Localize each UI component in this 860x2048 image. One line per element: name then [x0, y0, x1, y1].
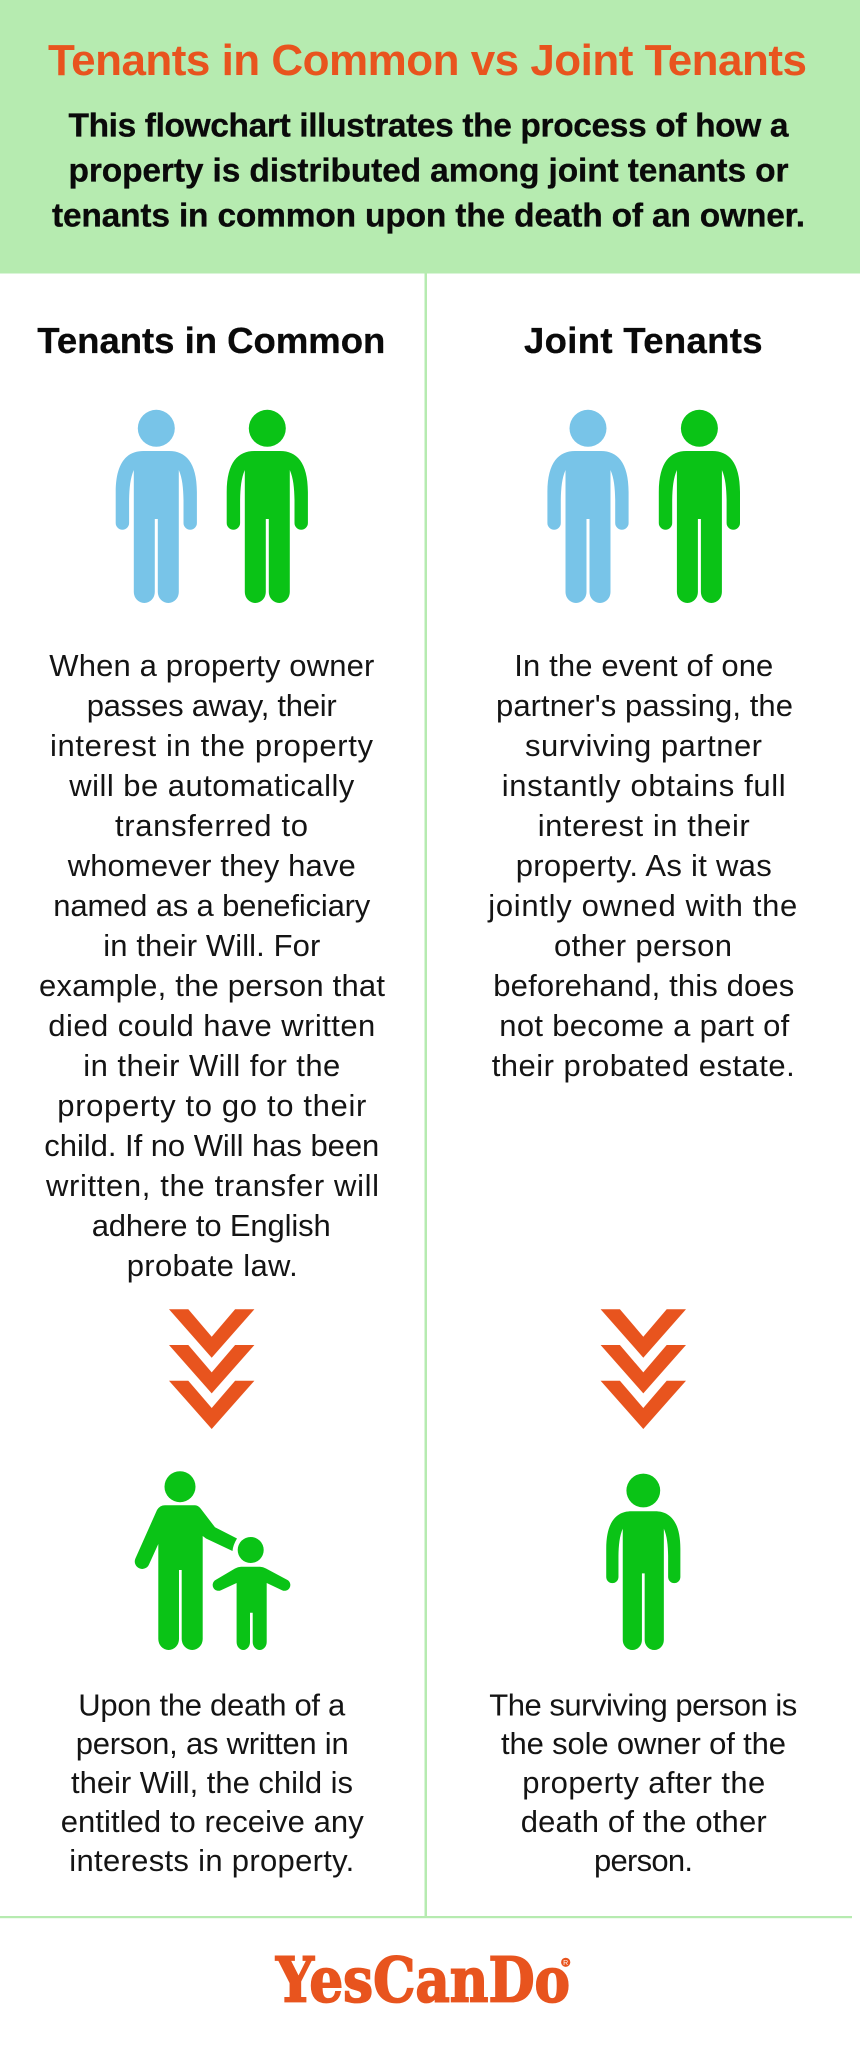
text block: tenants in common description: named as a beneficiary [53, 888, 371, 923]
logo: YesCanDo: YesCanDo [275, 1944, 570, 2016]
text block: joint tenants description: not become a part of [499, 1008, 790, 1043]
arrow: triple chevron down, left [169, 1309, 254, 1429]
text block: joint tenants outcome: person. [594, 1843, 693, 1878]
text block: joint tenants outcome: The surviving person is [489, 1687, 797, 1722]
text block: tenants in common description [39, 648, 385, 1283]
text block: joint tenants description: property. As it was [516, 848, 772, 883]
intro text [52, 108, 805, 234]
text block: joint tenants description: beforehand, this does [493, 968, 794, 1003]
text block: tenants in common description: passes away, their [87, 688, 337, 723]
icon: two people, tenants in common [116, 410, 308, 603]
text block: joint tenants description: In the event of one [514, 648, 773, 683]
arrow: triple chevron down, right [601, 1309, 686, 1429]
intro text: This flowchart illustrates the process of how a [68, 108, 789, 144]
icon: two people, joint tenants [547, 410, 740, 603]
text block: tenants in common description: child. If no Will has been [44, 1128, 379, 1163]
text block: joint tenants outcome: death of the other [521, 1804, 767, 1839]
text block: tenants in common description: interest in the property [50, 728, 374, 763]
text block: tenants in common description: will be automatically [68, 768, 355, 803]
text block: tenants in common description: example, the person that [39, 968, 385, 1003]
icon: adult with child [135, 1471, 290, 1650]
text block: tenants in common description: adhere to English [92, 1208, 331, 1243]
text block: joint tenants description: partner's passing, the [496, 688, 793, 723]
text block: tenants in common outcome: interests in property. [69, 1843, 354, 1878]
text block: tenants in common outcome: Upon the death of a [78, 1687, 346, 1722]
intro text: property is distributed among joint tenants or [68, 152, 788, 190]
text block: joint tenants description: jointly owned with the [487, 888, 797, 923]
text block: tenants in common description: whomever they have [67, 848, 356, 883]
text block: tenants in common outcome: person, as written in [76, 1726, 349, 1761]
text block: tenants in common description: When a property owner [49, 648, 374, 683]
text block: tenants in common description: died could have written [48, 1008, 375, 1043]
text block: joint tenants outcome: the sole owner of the [501, 1726, 786, 1761]
panel: tenants in common [37, 320, 385, 1878]
text block: joint tenants description [487, 648, 797, 1083]
text block: joint tenants description: other person [554, 928, 732, 963]
text block: tenants in common outcome: their Will, the child is [71, 1765, 353, 1800]
intro text: tenants in common upon the death of an owner. [52, 198, 805, 234]
text block: tenants in common description: transferred to [115, 808, 308, 843]
text block: joint tenants description: surviving partner [525, 728, 762, 763]
logo: YesCanDo: R [563, 1960, 568, 1967]
text block: tenants in common outcome [61, 1687, 364, 1878]
text block: joint tenants description: instantly obtains full [502, 768, 786, 803]
text block: joint tenants description: interest in their [538, 808, 750, 843]
panel: joint tenants [487, 320, 797, 1878]
text block: joint tenants description: their probated estate. [492, 1048, 795, 1083]
text block: joint tenants outcome [489, 1687, 797, 1878]
icon: surviving person [606, 1474, 680, 1650]
text block: tenants in common description: written, the transfer will [45, 1168, 379, 1203]
text block: tenants in common description: probate law. [127, 1248, 298, 1283]
text block: tenants in common description: in their Will. For [103, 928, 320, 963]
heading: tenants in common: Tenants in Common [37, 320, 385, 361]
heading: joint tenants: Joint Tenants [524, 320, 762, 361]
panel: header band [0, 0, 860, 274]
text block: tenants in common description: in their Will for the [83, 1048, 340, 1083]
text block: tenants in common outcome: entitled to receive any [61, 1804, 364, 1839]
text block: tenants in common description: property to go to their [57, 1088, 366, 1123]
title: Tenants in Common vs Joint Tenants [48, 36, 807, 85]
text block: joint tenants outcome: property after the [522, 1765, 765, 1800]
